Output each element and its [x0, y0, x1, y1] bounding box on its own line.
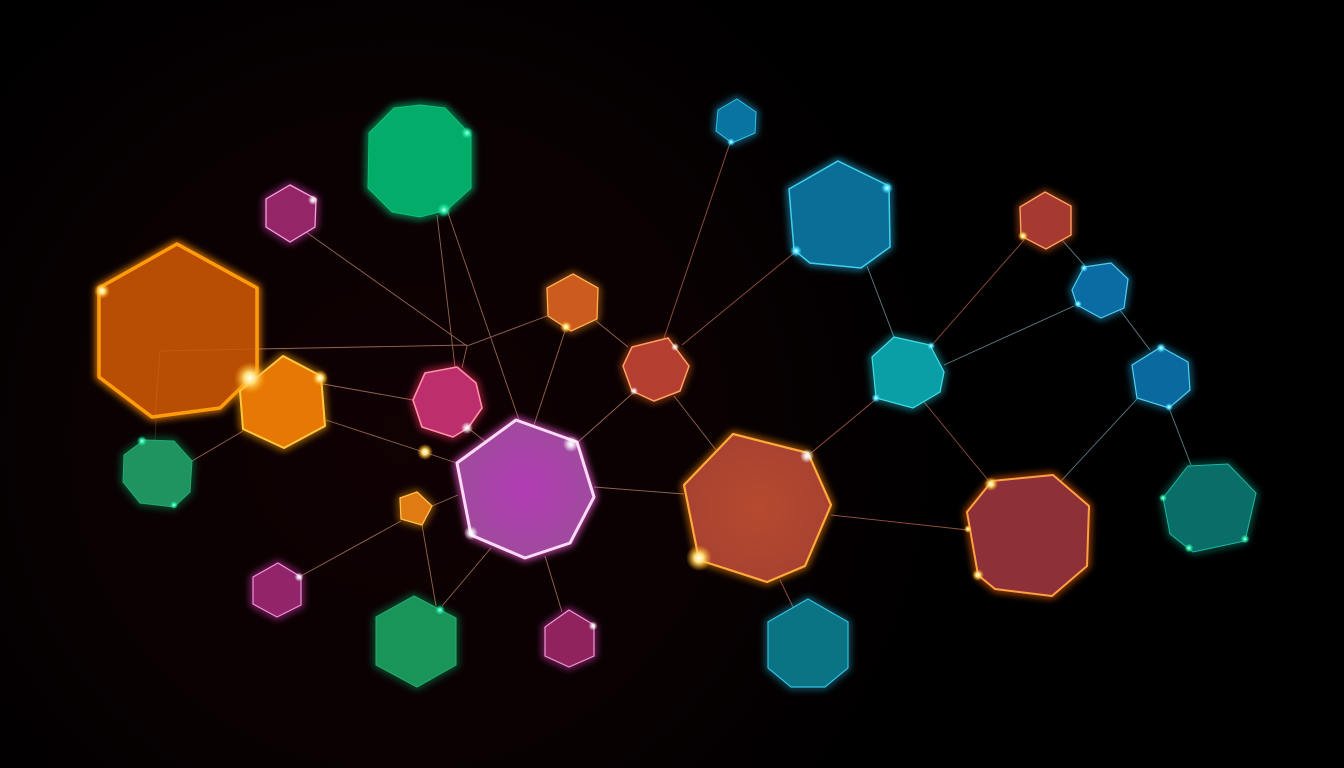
node: upper magenta hexagon [266, 185, 318, 242]
node: right teal polygon [1159, 464, 1256, 552]
node: bottom magenta hexagon [545, 610, 598, 667]
node: red heptagon [623, 338, 689, 401]
node: left green polygon [123, 436, 192, 509]
node: far right blue hexagon [1132, 343, 1190, 411]
node: small orange hexagon [547, 274, 598, 333]
node: tiny orange pentagon [400, 492, 432, 525]
node: large red-orange polygon [684, 434, 831, 582]
connecting lines [155, 143, 1191, 612]
node: top green polygon [368, 105, 473, 217]
node: large crimson polygon [964, 475, 1089, 596]
node: pink octagon [413, 367, 482, 437]
node: central purple polygon [457, 420, 594, 558]
node: bottom teal polygon [768, 599, 848, 687]
node: orange heptagon [234, 356, 328, 448]
node: large orange polygon [94, 244, 258, 417]
glowing junction dot [417, 444, 433, 460]
node: large blue polygon [789, 161, 893, 268]
node: right blue heptagon [1072, 263, 1128, 318]
node: lower-left magenta hexagon [253, 563, 304, 617]
node: lower green hexagon [376, 596, 456, 687]
node: cyan polygon [872, 337, 944, 408]
node: upper-right red hexagon [1018, 192, 1071, 249]
node: top blue hexagon [716, 99, 756, 146]
